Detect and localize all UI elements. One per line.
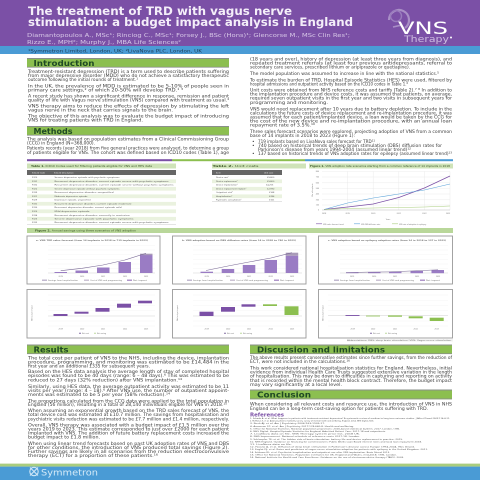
- chart panel c: annual budget, epilepsy adoption: 2022: [415, 276, 419, 278]
- table 1: ICD-10 codes: F331: [32, 204, 38, 206]
- text block: methods: The analysis was based on population estimates from a Clinical Commissioning Group: [26, 136, 229, 142]
- figure footnote: [347, 339, 453, 342]
- text block: conclusion: England can be a long-term cost-saving option for patients suffering with TRD.: [250, 406, 428, 412]
- chart panel c: annual budget, epilepsy adoption: [318, 236, 452, 284]
- text block: results: for other conditions, the introduction of VNS produced total savings (Figure 2).: [28, 445, 229, 451]
- chart panel a: annual budget, sales forecast: 2020: [80, 276, 84, 278]
- figure 1: VNS adoption scenarios line chart: 2022: [422, 213, 427, 215]
- authors: Rizzo E., MPH²; Murphy J., MBA Life Sciences²: [27, 40, 181, 46]
- chart panel b: annual budget, DBS diffusion: Net impact: [280, 279, 294, 282]
- references: 3. Rush AJ, et al. Am J Psychiatry 2006;163:1905-17.: [250, 422, 326, 425]
- figure 2 caption: [27, 228, 453, 233]
- chart panel a: annual budget, sales forecast: [27, 236, 160, 284]
- text block: results: reduced to 27 days (32% reduction) after VNS implantation.¹⁴: [28, 377, 182, 383]
- section heading: Conclusion: [250, 390, 452, 400]
- chart panel d: net budget impact, sales forecast: 2020: [80, 329, 84, 331]
- figure 1: VNS adoption scenarios line chart: 2020: [371, 213, 375, 215]
- text block: methods continued: •: [252, 152, 255, 157]
- figure 1: VNS adoption scenarios line chart: 2018: [322, 213, 326, 215]
- table 1: ICD-10 codes: Depressive episode, unspecified: [54, 199, 91, 202]
- text block: methods: [26, 136, 229, 156]
- table 2: unit costs: Item: [216, 171, 221, 174]
- section heading: Conclusion: Conclusion: [257, 390, 311, 400]
- text block: results: ments was estimated to be 5 per year (58% reduction).¹⁴: [28, 392, 170, 398]
- text block: introduction: vagus nerve in the neck that carries signals to the brain.: [28, 108, 173, 114]
- authors: Diamantopoulos A., MSc¹; Rinciog C., MSc¹; Forsey J., BSc (Hons)¹; Glencorse M., MSc Clin Res¹;: [27, 33, 350, 39]
- text block: methods continued: Parkinson's disease from years 1994-2004 (assumed linear trend)¹²: [258, 147, 411, 153]
- table 2: unit costs: £168: [269, 192, 275, 194]
- text block: methods continued: base of 14 implants in 2018 to 2023 (Figure 1):: [250, 133, 355, 139]
- table 1: ICD-10 codes: [27, 164, 176, 225]
- table 1: ICD-10 codes: Recurrent depressive disorder, current episode severe with psychotic symptoms: [54, 221, 168, 224]
- text block: results: therapy (ECT) for a proportion of these patients.¹⁶: [28, 453, 158, 459]
- chart panel e: net budget impact, DBS diffusion: Net budget impact: [176, 305, 179, 321]
- title: The treatment of TRD with vagus nerve: [28, 4, 292, 18]
- table 1: ICD-10 codes: Table 1. ICD10 Codes used for filtering patients eligible for VNS and HES data: [31, 164, 153, 168]
- authors: [27, 33, 350, 46]
- text block: conclusion: [250, 402, 452, 412]
- text block: discussion: The above results present conservative estimates since further savings, from the reduction of: [249, 355, 452, 361]
- text block: introduction: VNS for treating patients with TRD in England.: [28, 118, 143, 124]
- text block: methods continued: VNS would need replacement after 10 years due to battery depletion. To include in the: [250, 106, 452, 112]
- text block: introduction: outcome following the initial rounds of treatment.¹: [28, 77, 138, 83]
- table 1: ICD-10 codes: Severe depressive episode with psychotic symptoms: [54, 176, 120, 179]
- table 2: unit costs: £2,990: [267, 188, 275, 190]
- text block: results: budget impact to £1.8 million.: [28, 434, 100, 440]
- references: 1. Fekadu A, et al. What happens to patients with treatment-resistant depression? A systematic review of medium to long term outcome studies. J Affect Disord 2009;116:4-11.: [250, 417, 451, 420]
- text block: introduction: The objective of this analysis was to evaluate the budget impact of introducing: [27, 114, 229, 120]
- references: [250, 413, 451, 459]
- figure 1: VNS adoption scenarios line chart: 400: [316, 194, 319, 196]
- text block: discussion: ECT, were not included in the calculations.¹⁶: [250, 359, 350, 365]
- chart panel a: annual budget, sales forecast: Savings from hospitalisation: [48, 279, 78, 282]
- references: 14. Feldman RL, et al. Psychiatric hospitalisation and outpatient use after VNS implantation. Brain Stimul 2013.: [250, 451, 391, 454]
- table 1: ICD-10 codes: F330: [32, 207, 38, 209]
- chart panel e: net budget impact, DBS diffusion: 2023: [290, 329, 294, 331]
- title: stimulation: a budget impact analysis in England: [28, 15, 353, 29]
- table 1: ICD-10 codes: F322: [32, 188, 38, 190]
- chart panel d: net budget impact, sales forecast: 2023: [144, 329, 148, 331]
- chart panel a: annual budget, sales forecast: a. VNS TRD sales forecast (from 14 implants in 2018 to 719 implants in 2023): [36, 239, 148, 242]
- table 1: ICD-10 codes: ICD-10 Code: [32, 172, 46, 174]
- chart panel e: net budget impact, DBS diffusion: Net saving: [243, 332, 252, 335]
- chart panel a: annual budget, sales forecast: 2023: [144, 276, 148, 278]
- section heading: Introduction: Introduction: [34, 59, 94, 68]
- title: [28, 4, 353, 29]
- text block: results: total device cost was estimated at £10.7 million. The savings from hospitalisation and: [28, 412, 229, 418]
- chart panel b: annual budget, DBS diffusion: b. VNS adoption based on DBS diffusion rates (from 14 in 2018 to 740 in 2023): [182, 239, 296, 242]
- chart panel f: net budget impact, epilepsy adoption: Net cost: [373, 332, 380, 335]
- text block: results: The proportions calculated from the CCG data were applied to the total population in: [27, 398, 229, 404]
- references: 2. McManus S, et al. Adult psychiatric morbidity survey: survey of mental health and wellbeing, England, 2014. NHS Digital 2016.: [250, 420, 374, 423]
- chart panel b: annual budget, DBS diffusion: Cost of VNS and programming: [236, 279, 268, 282]
- figure 1: VNS adoption scenarios line chart: [309, 164, 453, 226]
- references: 7. LivaNova data on file. VNS Therapy system price list, 2018 UK.: [250, 433, 361, 436]
- table 2: unit costs: Device replacement⁹: [216, 180, 238, 183]
- table 1: ICD-10 codes: F334: [32, 215, 38, 217]
- text block: methods continued: 740 based on historical trends of deep brain stimulation (DBS) diffusion rates for: [258, 143, 442, 149]
- table 2: unit costs: Outpatient visit⁸: [216, 191, 233, 194]
- text block: results: Similarly, using HES data, the average outpatient activity was estimated to be 11: [28, 384, 229, 390]
- table 2: unit costs: £161: [269, 200, 275, 202]
- figure 1: VNS adoption scenarios line chart: 800: [316, 171, 319, 173]
- chart panel d: net budget impact, sales forecast: 2022: [123, 329, 127, 331]
- references: 11. LivaNova data on file.: [250, 443, 293, 446]
- text block: methods continued: [249, 56, 453, 157]
- table 2: unit costs: Device replacement implant⁸: [216, 188, 246, 190]
- text block: methods continued: The model population was assumed to increase in line with the national statistics.⁵: [249, 71, 439, 77]
- chart panel d: net budget impact, sales forecast: Net budget impact: [30, 305, 34, 321]
- chart panel a: annual budget, sales forecast: 2019: [59, 276, 63, 278]
- figure 1: VNS adoption scenarios line chart: 600: [316, 182, 319, 184]
- figure 1: VNS adoption scenarios line chart: 500: [316, 188, 319, 190]
- chart panel f: net budget impact, epilepsy adoption: 2021: [393, 329, 397, 331]
- chart panel e: net budget impact, DBS diffusion: 2019: [205, 329, 209, 331]
- section heading: Discussion and limitations: Discussion and limitations: [257, 345, 386, 354]
- chart panel f: net budget impact, epilepsy adoption: 2022: [414, 329, 418, 331]
- text block: introduction: In the UK, the prevalence of MDD is estimated to be 5-10% of people seen in: [28, 84, 229, 90]
- chart panel f: net budget impact, epilepsy adoption: 2019: [351, 329, 355, 331]
- text block: results: first year and an additional £335 for subsequent years.: [28, 364, 150, 370]
- section heading: Introduction: [27, 58, 229, 68]
- chart panel a: annual budget, sales forecast: Net impact: [133, 279, 147, 282]
- text block: conclusion: When considering all relevant costs and resource use, the introduction of VNS in NHS: [250, 402, 452, 408]
- table 2: unit costs: £286: [269, 196, 275, 198]
- table 2: unit costs: Table 2. Unit costs: [212, 164, 260, 168]
- chart panel c: annual budget, epilepsy adoption: 2019: [350, 276, 354, 278]
- table 1: ICD-10 codes: ICD-10 Description: [54, 171, 74, 174]
- figure 1: VNS adoption scenarios line chart: 2021: [397, 213, 401, 215]
- table 1: ICD-10 codes: Recurrent depressive disorder, current episode severe without psychotic symptoms: [54, 184, 174, 187]
- figure 1: VNS adoption scenarios line chart: VNS sales forecast trend: [323, 223, 344, 226]
- table 1: ICD-10 codes: Mild depressive episode: [54, 210, 90, 213]
- chart panel b: annual budget, DBS diffusion: [172, 236, 306, 284]
- text block: methods continued: secondary care services, prescribed lithium or aripiprazole or quetiapine).: [250, 64, 410, 70]
- chart panel a: annual budget, sales forecast: 2021: [101, 276, 105, 278]
- text block: results: The total cost per patient of VNS to the NHS, including the device, implantation: [27, 356, 229, 362]
- table 2: unit costs: £4,255: [266, 185, 274, 187]
- table 2: unit costs: £9,800: [267, 181, 275, 183]
- text block: methods: Patients records (year 2018) from five general practices were analysed, to determine a group: [27, 146, 229, 152]
- chart panel e: net budget impact, DBS diffusion: 2020: [226, 329, 230, 331]
- chart panel f: net budget impact, epilepsy adoption: Net budget impact: [322, 305, 324, 321]
- references: 9. Schlaepfer TE, et al. The hidden side of brain stimulation: battery life and device replacement in practice, 2015.: [250, 438, 404, 441]
- chart panel f: net budget impact, epilepsy adoption: [318, 290, 452, 338]
- text block: methods continued: repayment rate of 3.5%.¹⁰: [250, 122, 315, 128]
- text block: methods continued: •: [252, 140, 255, 145]
- table 1: ICD-10 codes: F333: [32, 222, 38, 224]
- figure 1: VNS adoption scenarios line chart: VNS rate of adoption in epilepsy: [399, 223, 426, 226]
- chart panel f: net budget impact, epilepsy adoption: Net saving: [388, 332, 397, 335]
- chart panel e: net budget impact, DBS diffusion: Net cost: [227, 332, 234, 335]
- table 1: ICD-10 codes: Recurrent depressive disorder, current episode moderate: [54, 202, 132, 206]
- table 2: unit costs: £9,800: [267, 177, 275, 179]
- references: 4. Aaronson ST, et al. Am J Psychiatry 2017;174:640-8. Health and wellbeing.: [250, 425, 355, 428]
- text block: introduction: [27, 69, 230, 124]
- text block: methods continued: the implantation procedure and device costs, it was assumed that patients, on average,: [250, 92, 452, 98]
- references: 5. Office for National Statistics. National population projections: 2016-based statistical bulletin. 2017. London, ONS.: [250, 427, 401, 430]
- text block: introduction: from major depressive disorder (MDD) who do not achieve a satisfactory therapeutic: [28, 73, 230, 79]
- references: References: [250, 413, 284, 419]
- chart panel c: annual budget, epilepsy adoption: c. VNS adoption based on epilepsy adoption rates (from 14 in 2018 to 137 in 2023): [328, 239, 446, 242]
- text block: results: [27, 356, 229, 459]
- references: 6. NHS Digital. Hospital Episode Statistics for England: Admitted Patient Care, 2017-18 and outpatients.: [250, 430, 387, 433]
- table 1: ICD-10 codes: Recurrent depressive disorder, currently in remission: [54, 214, 130, 217]
- text block: results: Based on the HES data analysis the average length of stay of completed hospital: [28, 369, 229, 375]
- text block: methods continued: Three sales forecast scenarios were explored, projecting adoption of VNS from a common: [249, 129, 452, 135]
- text block: results: England (56 million), resulting in a total of 28,140 individuals eligible for VNS in 2018.¹⁵: [28, 402, 227, 408]
- logo: VNS Therapy: Therapy: [403, 35, 449, 45]
- chart panel c: annual budget, epilepsy adoption: Net impact: [426, 279, 440, 282]
- table 1: ICD-10 codes: Recurrent depressive disorder, current episode mild: [54, 206, 122, 209]
- table 2: unit costs: Device cost⁷: [216, 176, 229, 179]
- figure 1: VNS adoption scenarios line chart: 100: [316, 205, 319, 207]
- chart panel e: net budget impact, DBS diffusion: [172, 290, 306, 338]
- text block: introduction: Treatment-resistant depression (TRD) is a term used to describe patients suffering: [27, 69, 229, 75]
- section heading: Methods: [27, 126, 229, 136]
- text block: methods continued: To estimate the burden of TRD, Hospital Episode Statistics (HES) were used, filtered by: [249, 78, 452, 84]
- table 1: ICD-10 codes: F332: [32, 185, 38, 187]
- table 1: ICD-10 codes: Recurrent depressive disorder, current episode severe with psychotic symptoms: [54, 180, 168, 183]
- figure 1: VNS adoption scenarios line chart: VNS DBS diffusion rate: [361, 223, 380, 226]
- text block: results: procedure, programming, and monitoring was estimated to be £14,484 in the: [28, 360, 229, 366]
- chart panel d: net budget impact, sales forecast: [27, 290, 160, 338]
- text block: methods continued: Unit costs were obtained from NHS reference costs and tariffs (Table 2).⁷ ⁸ In addition to: [250, 88, 452, 94]
- logo: VNS Therapy: [389, 10, 452, 45]
- text block: discussion: evidence from individual Health Care Trusts suggested extensive variation in the length: [250, 370, 452, 376]
- table 1: ICD-10 codes: F329: [32, 200, 38, 202]
- chart panel e: net budget impact, DBS diffusion: 2022: [269, 329, 273, 331]
- text block: introduction: primary care settings,² of which 20-50% will develop TRD.¹ ³: [28, 88, 183, 94]
- table 1: ICD-10 codes: Severe depressive episode with psychotic symptoms: [54, 218, 134, 220]
- chart panel b: annual budget, DBS diffusion: 2021: [247, 276, 251, 278]
- figure 1: VNS adoption scenarios line chart: 2023: [446, 213, 450, 215]
- chart panel e: net budget impact, DBS diffusion: 2021: [247, 329, 251, 331]
- chart panel d: net budget impact, sales forecast: 2019: [59, 329, 63, 331]
- table 1: ICD-10 codes: F321: [32, 196, 38, 198]
- section heading: Methods: Methods: [34, 127, 73, 136]
- chart panel b: annual budget, DBS diffusion: Savings from hospitalisation: [193, 279, 223, 282]
- figure 2 caption: Figure 2. Annual savings using three scenarios of VNS adoption: [35, 229, 137, 233]
- text block: discussion: may vary significantly at a local level.: [250, 382, 342, 388]
- table 1: ICD-10 codes: F339: [32, 192, 38, 194]
- text block: discussion: of hospitalisation. This may be down to difficulties in capturing and reporting on activity: [250, 374, 452, 380]
- footer band: [0, 463, 480, 480]
- text block: results: When using linear trend forecasts based on past UK adoption rates of VNS and DBS: [28, 441, 229, 447]
- text block: results: When assuming an exponential growth based on the TRD sales forecast of VNS, the: [28, 408, 229, 414]
- text block: methods continued: assumed that for each patient/implanted device, a loan would be taken by the CCG for: [250, 114, 452, 120]
- chart panel f: net budget impact, epilepsy adoption: 2023: [435, 329, 439, 331]
- chart panel c: annual budget, epilepsy adoption: 2021: [393, 276, 397, 278]
- text block: results: years 2019 to 2023. This estimate corresponded to just over £2000 for each patient: [28, 426, 229, 432]
- text block: introduction: VNS therapy aims to reduce the effects of depression by stimulating the left: [28, 104, 229, 110]
- chart panel c: annual budget, epilepsy adoption: 2020: [372, 276, 376, 278]
- chart panel d: net budget impact, sales forecast: Net saving: [97, 332, 106, 335]
- figure 1: VNS adoption scenarios line chart: 0: [318, 210, 319, 212]
- section heading: Results: [27, 344, 229, 354]
- references: 10. NHS England. Guidance on financing for commissioners: Public Works Loan Board interest rates and local loan repayment 2018.: [250, 440, 423, 443]
- text block: methods: (CCG) in England (N=368,000).: [27, 140, 95, 146]
- text block: methods continued: 137 based on historical trends of VNS adoption rates for epilepsy (assumed linear trend)¹³: [258, 151, 452, 157]
- header band: [0, 0, 480, 54]
- chart panel a: annual budget, sales forecast: Cost of VNS and programming: [90, 279, 122, 282]
- chart panel d: net budget impact, sales forecast: Net cost: [82, 332, 89, 335]
- tricolour divider: [27, 159, 453, 161]
- table 1: ICD-10 codes: F320: [32, 211, 38, 213]
- table 2: unit costs: Hospitalisation⁸: [216, 195, 232, 198]
- figure 1: VNS adoption scenarios line chart: 300: [316, 199, 319, 201]
- references: 8. NHS Improvement. National schedule of reference costs 2017-18. London.: [250, 435, 361, 438]
- text block: methods continued: hospital admissions and outpatient activity based on the ICD10 codes in Table 1.⁶: [250, 82, 408, 88]
- table 2: unit costs: Unit cost: [264, 171, 273, 174]
- text block: methods continued: programming and monitoring.: [250, 100, 328, 106]
- table 2: unit costs: [212, 164, 306, 202]
- table 1: ICD-10 codes: Moderate depressive episode: [54, 195, 88, 198]
- table 1: ICD-10 codes: F331: [32, 181, 38, 183]
- text block: results: psychiatric visits reduction was estimated to be £7.7 million and £1.4 million, respectively.: [28, 416, 229, 422]
- table 2: unit costs: Psychiatric consultation⁸: [216, 199, 242, 202]
- table 1: ICD-10 codes: Recurrent depressive disorder, unspecified: [54, 191, 114, 194]
- chart panel b: annual budget, DBS diffusion: 2022: [269, 276, 273, 278]
- text block: introduction: quality of life with Vagus nerve stimulation (VNS) compared with treatment as usual.⁴: [28, 98, 229, 104]
- chart panel c: annual budget, epilepsy adoption: 2023: [436, 276, 440, 278]
- text block: methods continued: (18 years and over), history of depression (at least three years from diagnosis), and: [250, 56, 452, 62]
- chart panel b: annual budget, DBS diffusion: 2019: [205, 276, 209, 278]
- text block: results: visits per year (range: 4 – 18).⁶ After VNS use, the number of outpatient appoint-: [28, 388, 229, 394]
- table 1: ICD-10 codes: F323: [32, 218, 38, 220]
- table 1: ICD-10 codes: Severe depressive episode without psychotic symptoms: [54, 188, 120, 190]
- affiliations: ¹Symmetron Limited, London, UK; ²LivaNova PLC, London, UK: [28, 48, 202, 54]
- references: 13. Englot DJ, et al. Rates and predictors of vagus nerve stimulation adoption for patients with epilepsy in the United Kingdom. 2011.: [250, 448, 429, 451]
- text block: methods continued: calculations the future costs of device replacement and re-implantation procedure, it was: [250, 110, 453, 116]
- chart panel b: annual budget, DBS diffusion: 2023: [290, 276, 294, 278]
- text block: discussion: that is recorded within the mental health block contract. Therefore, the budget impact: [250, 378, 452, 384]
- table 2: unit costs: Device implantation⁸: [216, 184, 238, 187]
- text block: discussion: This work considered national hospitalisation statistics for England. Nevertheless, initial: [249, 366, 452, 372]
- references: 12. Fasano A, et al. Diffusion of deep brain stimulation in Parkinson's disease across Europe 1994-2004. Mov Disord.: [250, 446, 416, 449]
- text block: introduction: A recent study has shown a significant difference in response, remission and patient: [28, 94, 229, 100]
- figure 1: VNS adoption scenarios line chart: 2019: [345, 213, 350, 215]
- section heading: Discussion and limitations: [250, 344, 452, 354]
- chart panel c: annual budget, epilepsy adoption: Cost of VNS and programming: [382, 279, 414, 282]
- text block: methods continued: required seven outpatient visits in the first year and two visits in subsequent years for: [250, 96, 452, 102]
- text block: results: episodes was found to be 40 days (range: 6 – 48 days).⁶ This was estimated to be: [28, 373, 229, 379]
- chart panel f: net budget impact, epilepsy adoption: 2020: [371, 329, 375, 331]
- figure 1: VNS adoption scenarios line chart: Figure 1. VNS adoption rate scenarios starting from a common reference of 14 implants in 2018: [310, 164, 450, 168]
- section heading: Results: Results: [34, 345, 69, 354]
- text block: methods continued: •: [252, 144, 255, 149]
- figure 1: VNS adoption scenarios line chart: 700: [316, 177, 319, 179]
- chart panel d: net budget impact, sales forecast: 2021: [101, 329, 105, 331]
- logo: VNS Therapy: VNS: [398, 19, 448, 38]
- text block: methods: of patients eligible for VNS. The cohort was defined based on ICD10 codes (Table 1), age: [27, 150, 229, 156]
- text block: results: Further savings are likely in all scenarios from the reduction electroconvulsive: [28, 449, 229, 455]
- footer logotype: Symmetron: [41, 468, 98, 478]
- chart panel c: annual budget, epilepsy adoption: Savings from hospitalisation: [340, 279, 370, 282]
- text block: results: implanted with VNS. The addition of future battery replacement costs increased the: [28, 430, 229, 436]
- text block: methods continued: the cost of the new device and re-implantation procedure, with an annual loan: [250, 118, 452, 124]
- text block: results: Overall, VNS therapy was associated with a budget impact of £1.5 million over the: [28, 422, 229, 428]
- text block: methods continued: repeated treatment referrals (at least four previous antidepressants, referral to: [250, 60, 452, 66]
- text block: methods continued: 719 implants based on LivaNova sales forecast for TRD¹¹: [258, 139, 375, 145]
- chart panel b: annual budget, DBS diffusion: 2020: [226, 276, 230, 278]
- table 1: ICD-10 codes: F320: [32, 177, 38, 179]
- references: 15. Office for National Statistics. Population estimates for UK, England and Wales, mid-2018. ONS, London.: [250, 453, 398, 456]
- figure 1: VNS adoption scenarios line chart: Years: [386, 218, 390, 221]
- figure 1: VNS adoption scenarios line chart: No. of implants: [311, 183, 314, 196]
- references: 16. National Institute for Health and Care Excellence. Guidance on the use of electroconvulsive therapy (TA59). 2003.: [250, 456, 405, 459]
- figure footnote: Abbreviations: DBS, deep brain stimulation; VNS, Vagus nerve stimulation.: [347, 339, 453, 342]
- icon: Symmetron mark: [30, 467, 38, 476]
- text block: discussion: [249, 355, 452, 388]
- chart panel a: annual budget, sales forecast: 2022: [123, 276, 127, 278]
